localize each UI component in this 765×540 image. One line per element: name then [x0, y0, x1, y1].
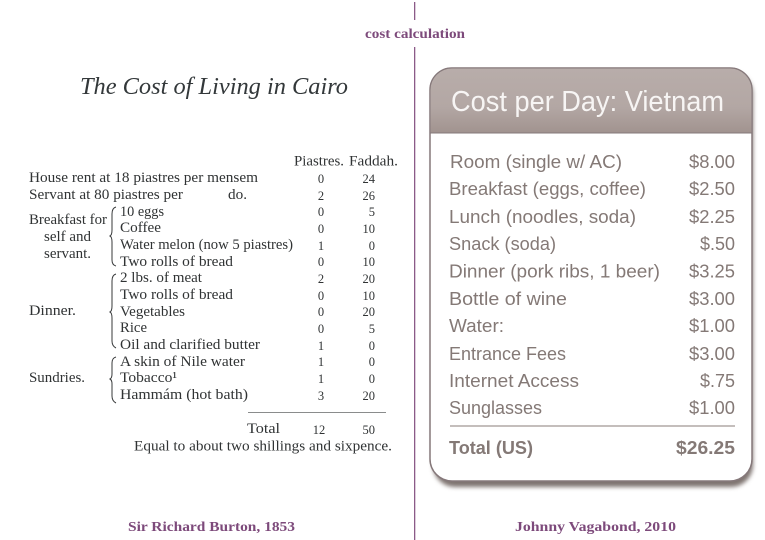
card item labels: Water:	[449, 315, 504, 336]
column headers: Piastres.	[294, 154, 344, 170]
faddah numbers: 10	[362, 255, 375, 269]
card item labels: Bottle of wine	[449, 288, 567, 309]
line items: Vegetables	[120, 304, 185, 320]
piastres numbers: 0	[318, 255, 324, 269]
card prices: $1.00	[689, 315, 735, 336]
group labels	[29, 212, 107, 386]
card prices: $3.00	[689, 343, 735, 364]
total row: 50	[362, 423, 375, 437]
card body	[430, 68, 752, 481]
rent and servant rows: House rent at 18 piastres per mensem	[29, 170, 258, 186]
faddah numbers: 20	[362, 305, 375, 319]
faddah numbers: 20	[362, 389, 375, 403]
piastres numbers: 1	[318, 339, 324, 353]
faddah numbers: 5	[369, 205, 375, 219]
card item labels: Internet Access	[449, 370, 579, 391]
piastres numbers	[318, 172, 324, 403]
panel: Burton 1853 cost table	[29, 74, 398, 454]
total rule	[248, 412, 386, 413]
card prices: $1.00	[689, 397, 735, 418]
card item labels: Snack (soda)	[449, 233, 556, 254]
faddah numbers: 24	[362, 172, 376, 186]
card rule	[450, 426, 735, 427]
title: The Cost of Living in Cairo: The Cost of Living in Cairo	[80, 74, 348, 100]
card total	[449, 437, 735, 458]
faddah numbers	[362, 172, 376, 403]
card shadow	[433, 72, 753, 487]
card header	[430, 68, 752, 133]
faddah numbers: 5	[369, 322, 375, 336]
line items: A skin of Nile water	[120, 354, 245, 370]
group labels: Dinner.	[29, 303, 76, 319]
faddah numbers: 10	[362, 289, 375, 303]
faddah numbers: 26	[362, 189, 375, 203]
piastres numbers: 2	[318, 272, 324, 286]
piastres numbers: 2	[318, 189, 324, 203]
piastres numbers: 0	[318, 222, 324, 236]
piastres numbers: 0	[318, 289, 324, 303]
rent and servant rows	[29, 170, 258, 203]
card prices: $8.00	[689, 151, 735, 172]
piastres numbers: 1	[318, 372, 324, 386]
faddah numbers: 0	[369, 339, 375, 353]
card prices: $2.25	[689, 206, 735, 227]
line items: Hammám (hot bath)	[120, 387, 248, 403]
faddah numbers: 0	[369, 239, 375, 253]
card prices	[689, 151, 735, 418]
line items: Two rolls of bread	[120, 287, 234, 303]
card prices: $3.00	[689, 288, 735, 309]
card prices: $2.50	[689, 178, 735, 199]
faddah numbers: 20	[362, 272, 375, 286]
line items: Rice	[120, 320, 147, 336]
column headers: Faddah.	[349, 154, 398, 170]
card total: Total (US)	[449, 437, 533, 458]
faddah numbers: 10	[362, 222, 375, 236]
total row: 12	[313, 423, 325, 437]
total row: Total	[247, 421, 280, 437]
line items: Oil and clarified butter	[120, 337, 260, 353]
center divider	[414, 2, 415, 540]
card item labels: Room (single w/ AC)	[450, 151, 622, 172]
line items: Two rolls of bread	[120, 254, 234, 270]
line items: Tobacco¹	[120, 370, 177, 386]
card total: $26.25	[676, 437, 735, 458]
card item labels: Breakfast (eggs, coffee)	[449, 178, 646, 199]
piastres numbers: 0	[318, 305, 324, 319]
line items: 2 lbs. of meat	[120, 270, 203, 286]
card prices: $3.25	[689, 260, 735, 282]
line items: 10 eggs	[120, 204, 164, 220]
card item labels: Sunglasses	[449, 397, 542, 418]
line items: Water melon (now 5 piastres)	[120, 237, 293, 253]
total row	[134, 421, 392, 454]
panel: Vietnam cost card	[430, 68, 753, 487]
line items: Coffee	[120, 220, 161, 236]
column headers	[294, 154, 398, 170]
line items	[120, 204, 293, 403]
faddah numbers: 0	[369, 372, 375, 386]
faddah numbers: 0	[369, 355, 375, 369]
piastres numbers: 0	[318, 205, 324, 219]
card prices: $.75	[700, 370, 735, 391]
heading: cost calculation: cost calculation	[365, 26, 466, 41]
card item labels: Dinner (pork ribs, 1 beer)	[449, 260, 660, 282]
piastres numbers: 0	[318, 172, 324, 186]
card title: Cost per Day: Vietnam	[451, 86, 724, 118]
card item labels: Lunch (noodles, soda)	[449, 206, 636, 227]
rent and servant rows: Servant at 80 piastres per	[29, 187, 183, 203]
caption: Vagabond: Johnny Vagabond, 2010	[515, 519, 676, 534]
piastres numbers: 0	[318, 322, 324, 336]
card prices: $.50	[700, 233, 735, 254]
caption: Burton: Sir Richard Burton, 1853	[128, 519, 295, 534]
piastres numbers: 1	[318, 239, 324, 253]
piastres numbers: 1	[318, 355, 324, 369]
group labels: servant.	[44, 246, 91, 262]
rent and servant rows: do.	[228, 187, 247, 203]
card item labels: Entrance Fees	[449, 343, 566, 364]
group labels: Sundries.	[29, 370, 85, 386]
braces	[110, 207, 116, 403]
group labels: self and	[44, 229, 91, 245]
card item labels	[449, 151, 660, 418]
group labels: Breakfast for	[29, 212, 107, 228]
piastres numbers: 3	[318, 389, 324, 403]
total row: Equal to about two shillings and sixpence.	[134, 438, 392, 454]
